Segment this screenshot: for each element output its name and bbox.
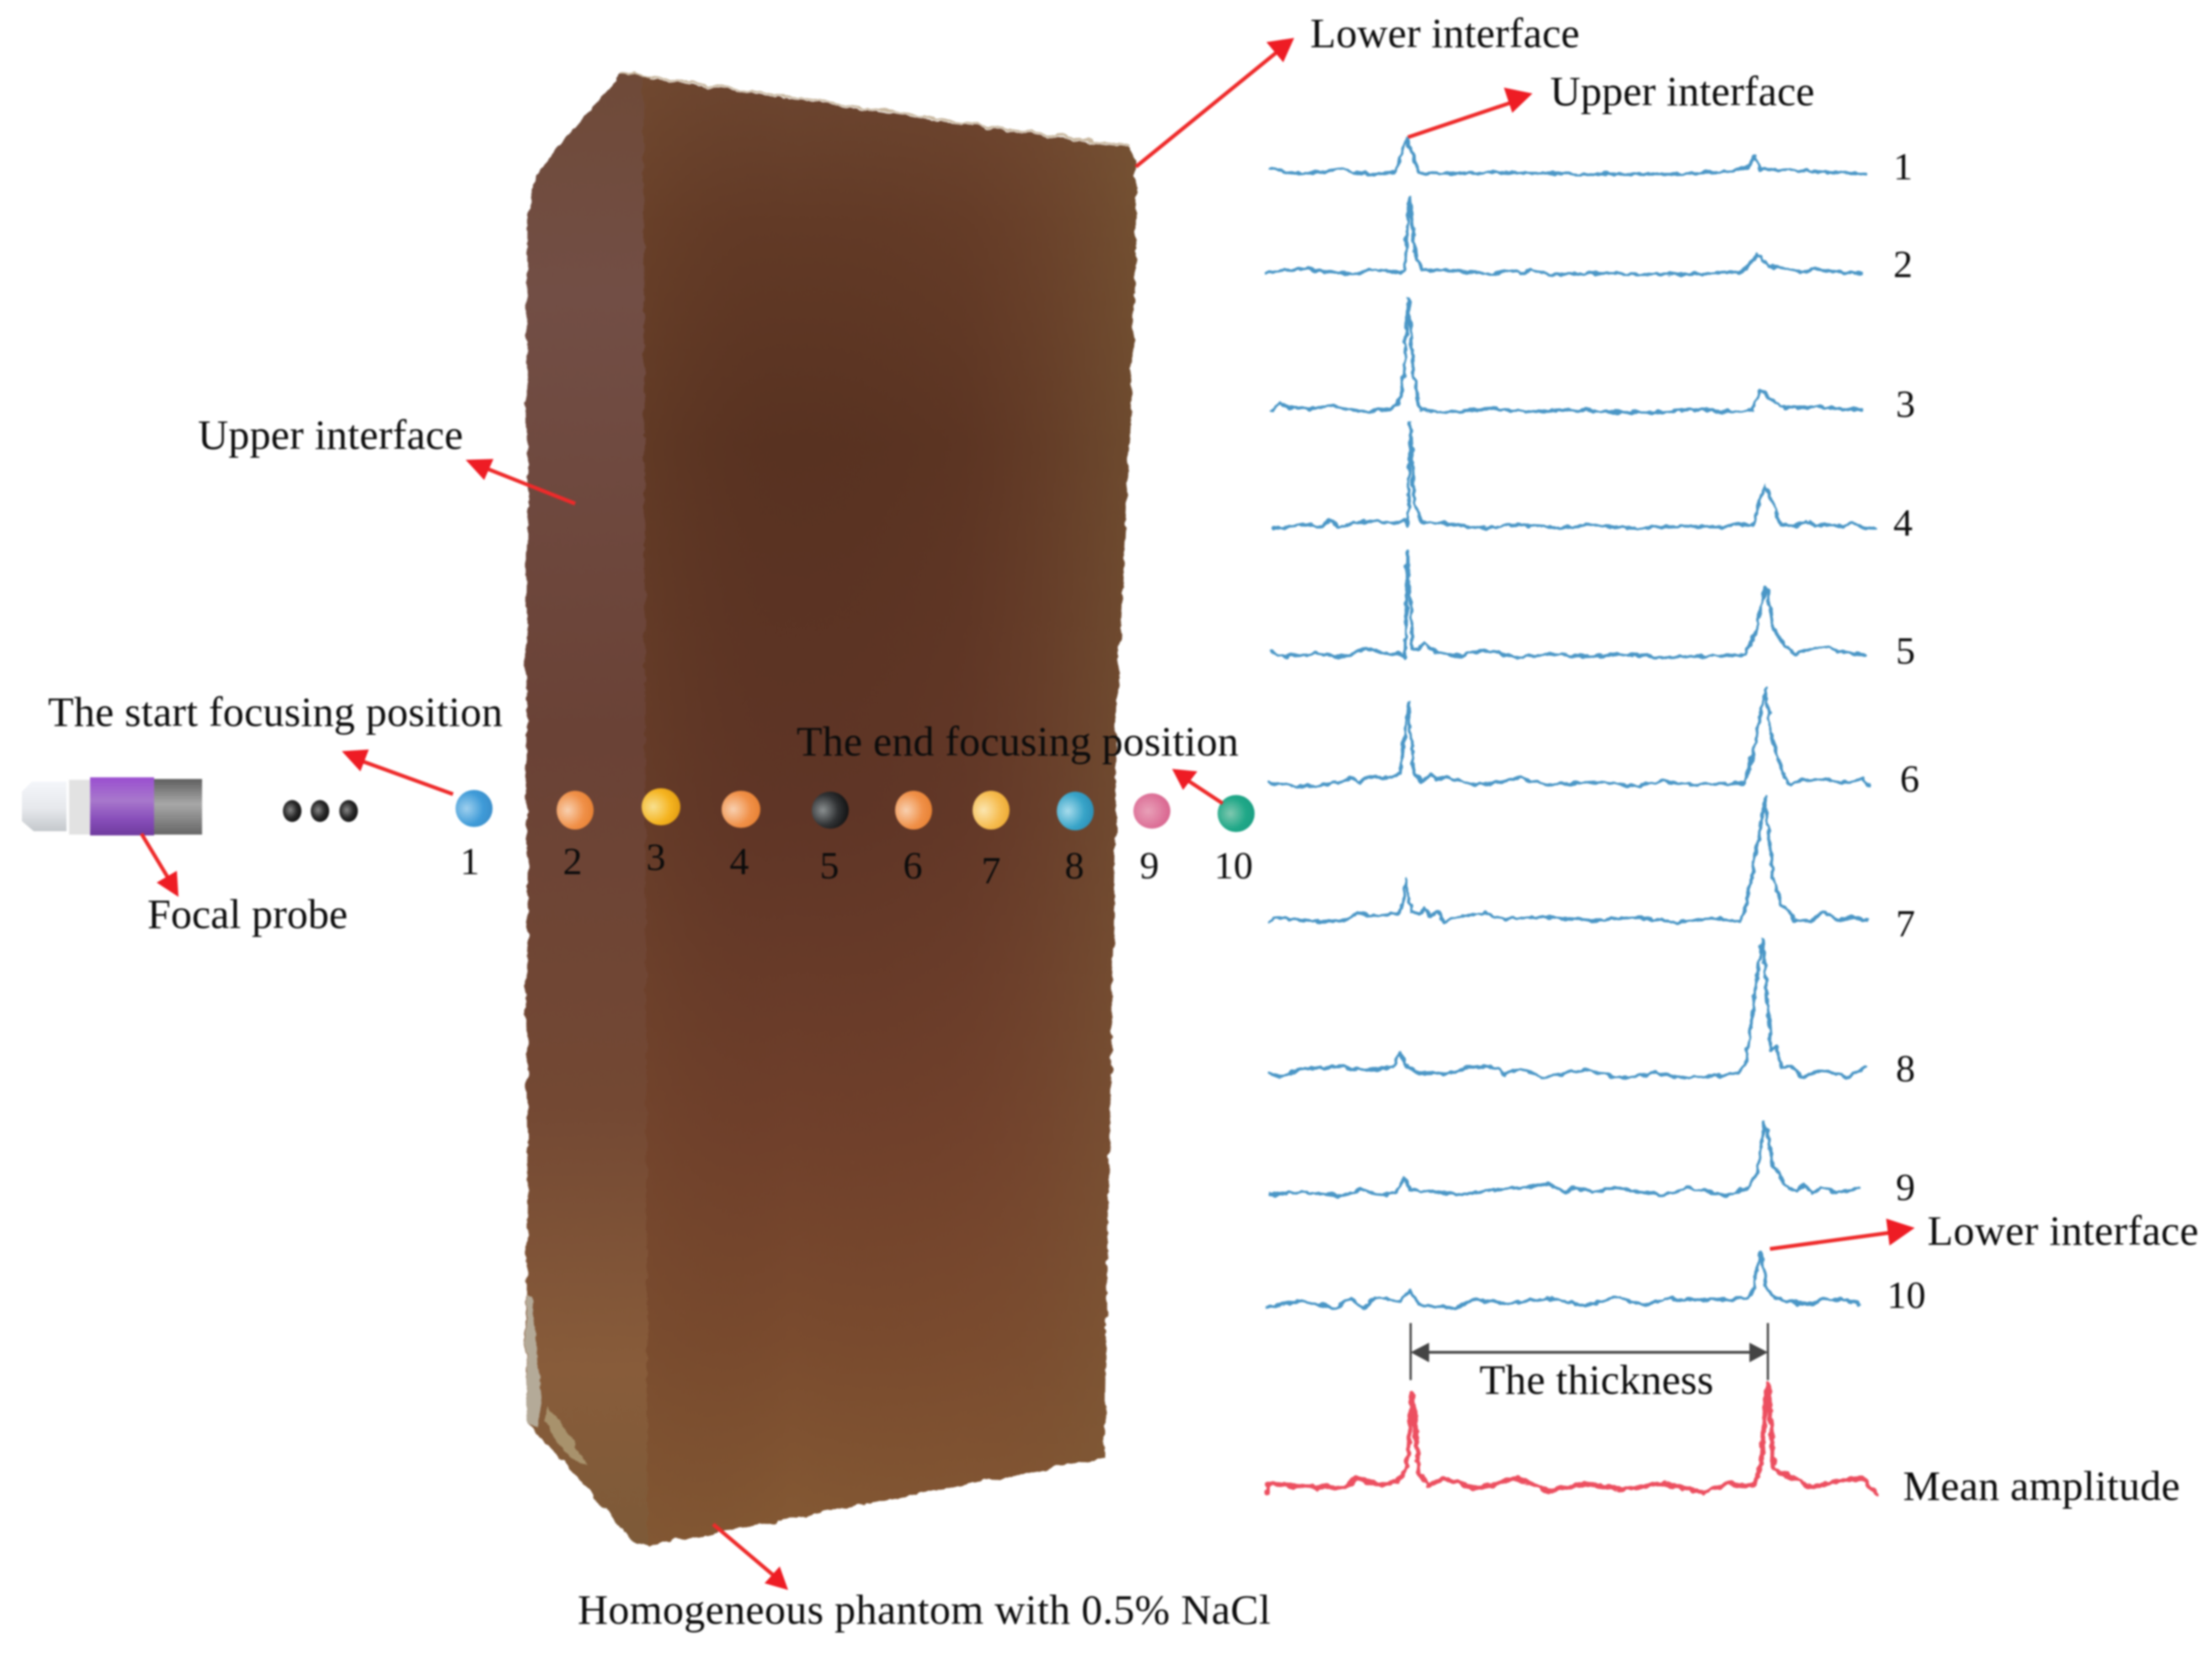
trace numbers: 3: [1896, 382, 1915, 425]
trace 4: [1274, 423, 1876, 528]
ellipsis dots: [283, 800, 358, 822]
trace numbers: 8: [1896, 1047, 1915, 1090]
label: homogeneous phantom: Homogeneous phantom with 0.5% NaCl: [578, 1586, 1271, 1633]
bead numbers: 7: [982, 849, 1000, 892]
trace 10: [1266, 1251, 1859, 1309]
phantom block: [525, 72, 1136, 1545]
trace numbers: 2: [1893, 243, 1913, 285]
label: lower interface bottom right: Lower interface: [1927, 1207, 2199, 1254]
trace 3: [1272, 298, 1861, 413]
trace 2: [1266, 196, 1861, 275]
bead numbers: 10: [1214, 844, 1253, 887]
A-line traces: [1266, 139, 1878, 1494]
bead numbers: 2: [562, 840, 583, 883]
bead numbers: [460, 835, 1253, 892]
arrow: block to lower interface: [1136, 38, 1294, 167]
probe gray body: [154, 779, 202, 835]
label: the start focusing position: The start focusing position: [48, 688, 503, 735]
trace numbers: 10: [1887, 1273, 1926, 1316]
bead numbers: 1: [460, 840, 480, 883]
block: silver edge: [526, 1297, 541, 1428]
label: focal probe: Focal probe: [147, 890, 348, 937]
trace numbers: 4: [1893, 501, 1913, 544]
trace numbers: 6: [1900, 757, 1920, 800]
trace 5: [1272, 552, 1865, 658]
probe collar: [69, 780, 90, 835]
block: side face: [525, 73, 650, 1545]
trace numbers: 7: [1896, 902, 1915, 945]
probe purple body: [90, 777, 154, 835]
block: top edge highlight: [621, 72, 1129, 147]
arrow: block to phantom label: [713, 1524, 788, 1590]
mean amplitude trace: [1266, 1384, 1878, 1494]
arrow: bead 1 to start position: [342, 750, 453, 794]
focal probe: [22, 777, 202, 835]
bead numbers: 9: [1140, 844, 1159, 887]
trace numbers: 5: [1896, 629, 1915, 672]
focusing position beads 1 to 10: [456, 788, 1255, 832]
label: mean amplitude: Mean amplitude: [1903, 1462, 2180, 1509]
thickness bracket: [1410, 1323, 1768, 1380]
bead numbers: 3: [647, 835, 665, 878]
trace 1: [1271, 139, 1865, 175]
arrow: probe to label: [141, 834, 179, 897]
label: lower interface top: Lower interface: [1310, 9, 1580, 56]
trace 8: [1270, 939, 1865, 1078]
bead numbers: 6: [903, 844, 923, 887]
label: upper interface right: Upper interface: [1550, 67, 1815, 115]
arrow: bead 10 to end position: [1172, 769, 1223, 803]
trace numbers: [1887, 145, 1926, 1316]
trace numbers: 1: [1893, 145, 1913, 188]
arrow: peak to lower interface: [1770, 1219, 1915, 1249]
arrow: peak to upper interface: [1408, 88, 1532, 137]
probe tip: [22, 782, 67, 831]
label: the thickness: The thickness: [1479, 1356, 1714, 1403]
bead numbers: 4: [729, 840, 749, 883]
arrow: block to upper interface: [466, 459, 575, 504]
trace 7: [1270, 798, 1868, 922]
red arrows: [141, 38, 1915, 1590]
block: corner wedge: [544, 1405, 589, 1467]
label: upper interface left: Upper interface: [198, 411, 463, 458]
block: front face shading: [643, 77, 1136, 1545]
label: the end focusing position: The end focusing position: [797, 718, 1239, 765]
block: front face: [643, 77, 1136, 1545]
trace 9: [1270, 1122, 1859, 1197]
bead numbers: 5: [820, 844, 839, 887]
trace 6: [1270, 689, 1868, 787]
trace numbers: 9: [1896, 1166, 1915, 1208]
bead numbers: 8: [1064, 844, 1085, 887]
